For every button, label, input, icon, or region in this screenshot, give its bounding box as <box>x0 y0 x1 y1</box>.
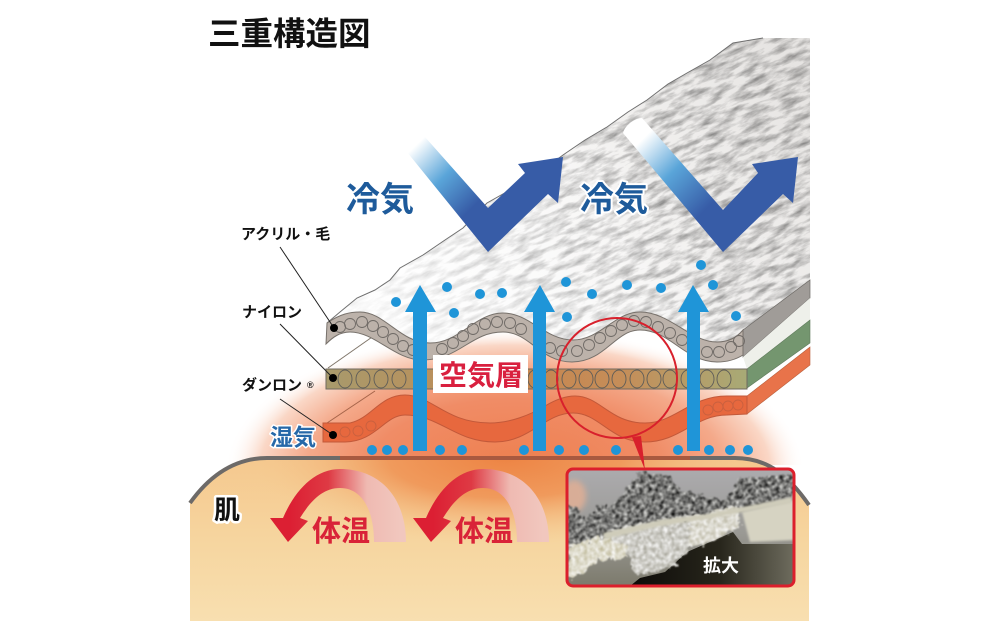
side faces of the layers <box>743 280 810 414</box>
leader line: nylon <box>280 324 337 382</box>
moisture dots lower <box>367 445 753 455</box>
cold air arrow 2 <box>623 118 798 252</box>
label: cold air 2: 冷気 <box>580 181 648 219</box>
magnifier circle and pointer <box>557 318 677 470</box>
label: magnified: 拡大 <box>703 556 739 576</box>
layer: acrylic and wool <box>326 312 744 362</box>
skin body <box>190 455 809 621</box>
label: body heat 2: 体温 <box>455 515 513 548</box>
back edges of inner layers <box>327 335 375 423</box>
panel: textured outer fabric surface <box>348 38 810 342</box>
layer: nylon <box>326 369 747 389</box>
title: 三重構造図 <box>208 16 371 52</box>
warm air glow <box>225 325 809 465</box>
label: moisture: 湿気 <box>270 424 316 450</box>
magnified photo <box>562 469 794 586</box>
moisture arrow 3 <box>678 285 709 451</box>
leader line: acrylic and wool <box>280 247 338 332</box>
leader line: Danlon <box>280 399 337 439</box>
moisture arrow 1 <box>405 285 436 451</box>
label: skin: 肌 <box>214 495 240 525</box>
label: acrylic and wool: アクリル・毛 <box>241 226 330 243</box>
moisture dots upper <box>391 260 741 322</box>
fabric surface outline <box>327 38 763 323</box>
moisture arrow 2 <box>524 285 555 451</box>
heat arrow 1 <box>270 469 406 542</box>
label: Danlon: ® <box>307 380 314 390</box>
heat arrow 2 <box>413 469 549 542</box>
layer: Danlon <box>323 395 747 442</box>
label: cold air 1: 冷気 <box>346 181 414 219</box>
label: nylon: ナイロン <box>242 304 302 321</box>
label: body heat 1: 体温 <box>312 515 370 548</box>
label: Danlon: ダンロン <box>242 377 302 394</box>
cold air arrow 1 <box>407 137 563 252</box>
label: air layer: 空気層 <box>439 360 523 391</box>
